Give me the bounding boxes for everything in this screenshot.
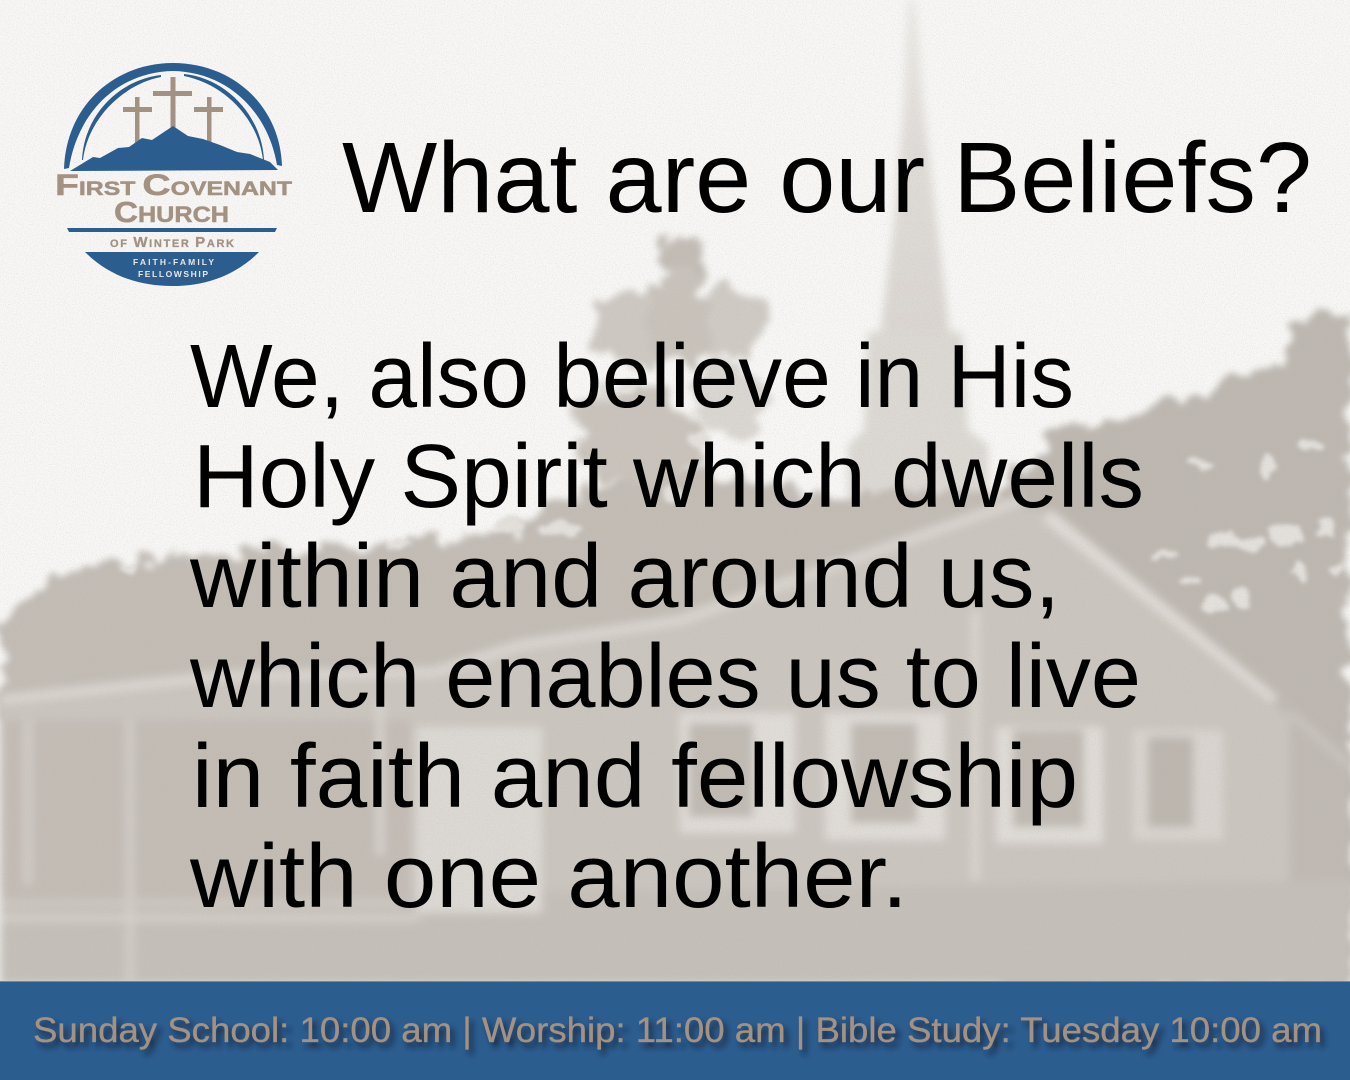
service times: Sunday School: 10:00 am | Worship: 11:00 am | Bible Study: Tuesday 10:00 am: [33, 1011, 1322, 1050]
logo arcs: [64, 63, 282, 169]
footer band: [0, 981, 1350, 1080]
logo: church name: F IRST C OVENANT: [55, 169, 292, 202]
centre tree: [572, 232, 767, 490]
body statement: [189, 327, 1144, 927]
sunlit foliage: [122, 377, 1347, 613]
windows: [680, 713, 795, 833]
logo: motto line 1: FAITH-FAMILY: [133, 257, 214, 267]
logo: three crosses: [123, 77, 223, 145]
body statement: Holy Spirit which dwells: [193, 427, 1144, 527]
logo: motto line 2: FELLOWSHIP: [138, 269, 208, 279]
right trees: [1000, 313, 1350, 985]
body statement: with one another.: [189, 827, 908, 927]
logo: motto segment: [85, 252, 259, 286]
body statement: in faith and fellowship: [192, 727, 1078, 827]
logo: church: CHURCH: [114, 197, 229, 229]
lower building: [0, 500, 1350, 1000]
logo: mountain: [70, 126, 278, 171]
logo: of winter park: OF WINTER PARK: [110, 234, 234, 251]
title: What are our Beliefs?: [342, 122, 1312, 234]
logo: divider: [67, 228, 277, 232]
steeple: [848, 0, 988, 560]
body statement: We, also believe in His: [190, 327, 1074, 427]
left trees and rear roof: [0, 468, 1010, 720]
body statement: within and around us,: [189, 527, 1060, 627]
logo: First Covenant Church of Winter Park: [55, 63, 292, 286]
body statement: which enables us to live: [189, 627, 1141, 727]
